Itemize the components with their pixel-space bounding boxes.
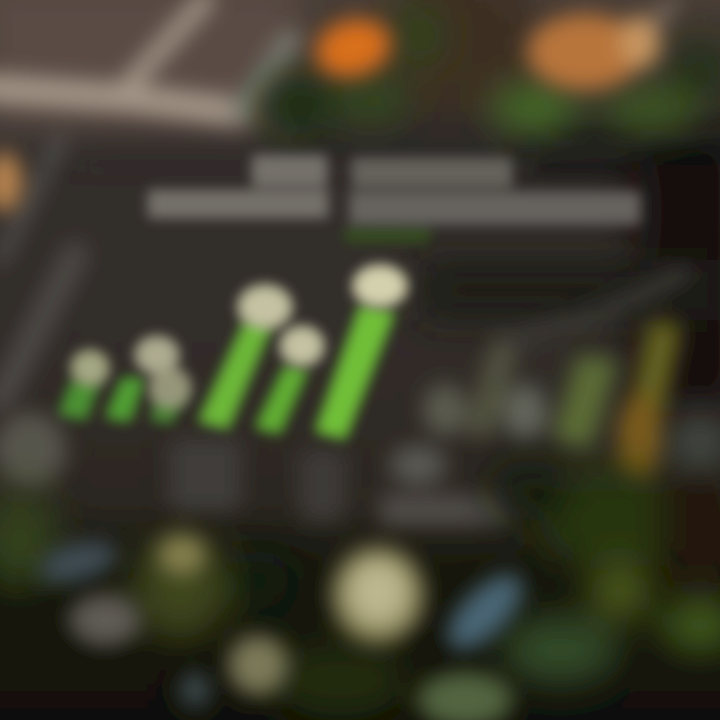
title: [148, 155, 640, 242]
bar chart: faded right bars: [423, 270, 690, 490]
bar chart: white caps: [71, 265, 407, 409]
right foliage: [490, 414, 720, 600]
icon: left orange flower: [0, 152, 22, 212]
icon: peach flower: [527, 0, 675, 90]
white blossoms: [69, 535, 513, 720]
icon: orange flower: [309, 11, 397, 85]
top band: [0, 0, 720, 410]
branch lines top left: [0, 0, 290, 400]
top foliage: [260, 0, 720, 135]
blue leaves: [35, 534, 534, 708]
axis labels: [0, 412, 510, 525]
bottom foliage: [0, 490, 720, 720]
bar chart: green bars: [58, 305, 395, 440]
